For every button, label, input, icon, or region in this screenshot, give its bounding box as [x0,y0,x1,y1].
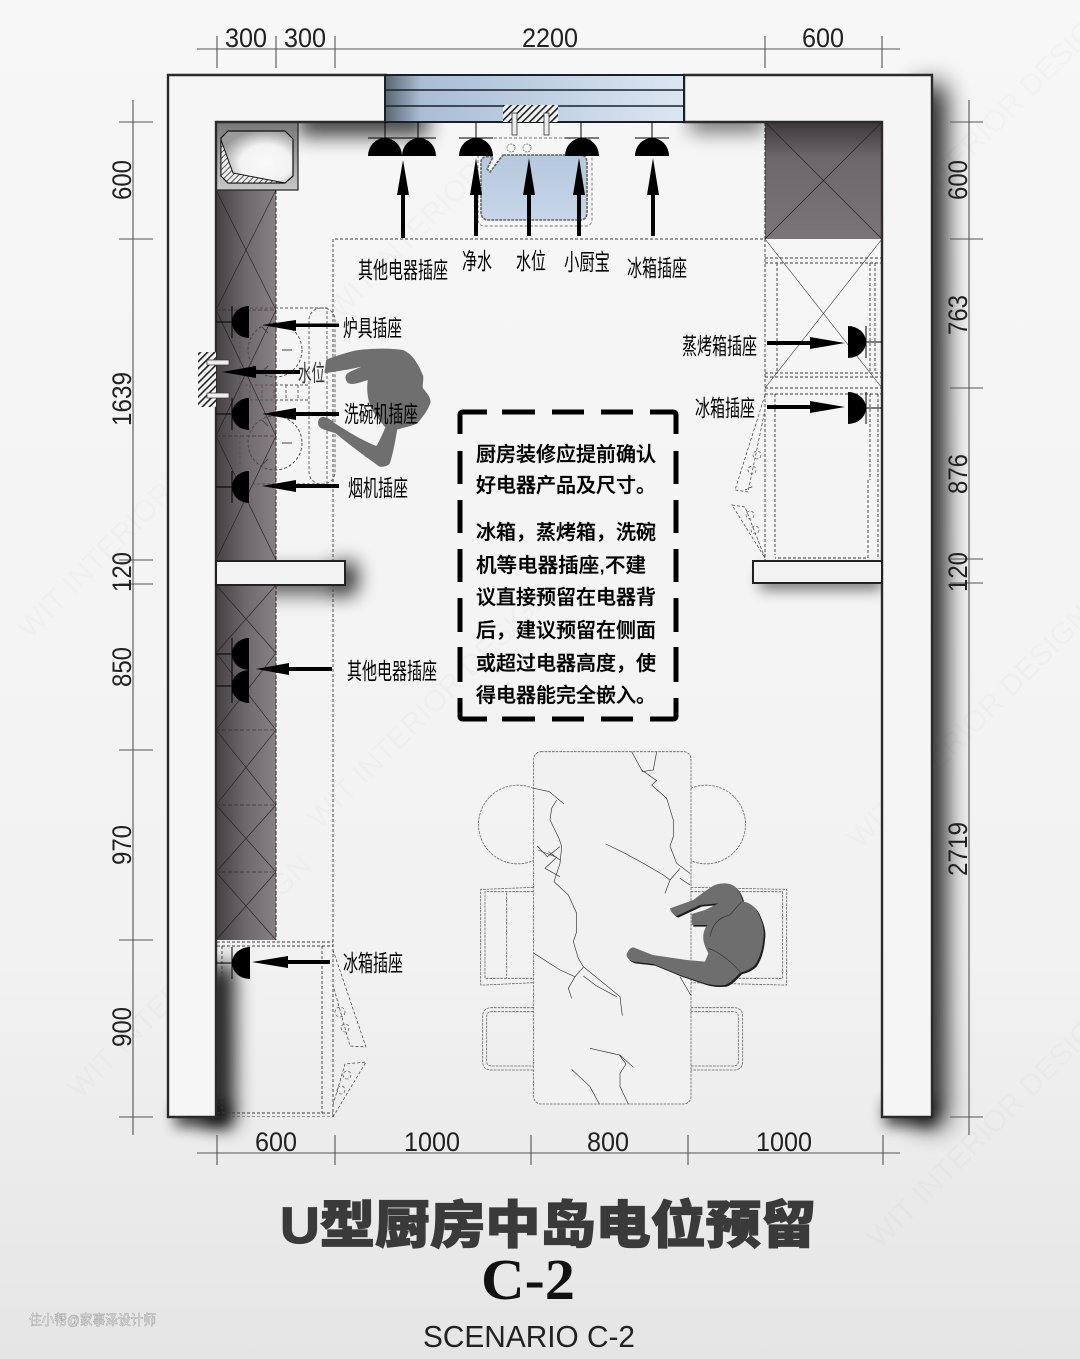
dimensions: top [197,23,900,68]
dimensions: bottom [197,1127,900,1165]
corner cabinet [216,122,298,190]
callout: note box: 好电器产品及尺寸。 [476,474,656,497]
dimensions: right: 876 [943,454,973,494]
dimensions: right: 763 [943,295,973,335]
right outlets and arrows [767,326,882,424]
dimensions: left: 600 [107,160,137,200]
dimensions: bottom: 1000 [756,1127,812,1157]
person at table [627,883,765,987]
dimensions: right: 600 [943,160,973,200]
label: fridge left: 冰箱插座 [343,950,403,976]
callout: note box [460,412,676,719]
dimensions: left [107,100,153,1135]
dimensions: right: 120 [943,552,973,592]
dimensions: left: 850 [107,647,137,687]
dimensions: top: 300 [284,23,326,53]
dimensions: left: 120 [107,552,137,592]
wall shadows [175,85,945,1127]
dimensions: bottom: 800 [587,1127,629,1157]
dining table and chairs [479,752,787,1104]
person at counter [319,349,430,466]
dimensions: left: 970 [107,825,137,865]
title: U型厨房中岛电位预留 [280,1197,816,1254]
fridge outlet left [216,947,330,979]
top outlet labels: 净水 [462,248,492,274]
source watermark: 住小帮@家事泽设计师 [29,1312,156,1328]
callout: note box: 议直接预留在电器背 [476,586,656,609]
dimensions: top: 300 [225,23,267,53]
dimensions: top: 2200 [522,23,578,53]
countertop and appliance outlines [217,239,882,1117]
dimensions: bottom: 1000 [404,1127,460,1157]
cabinets: dark tall units [216,122,882,940]
sink [478,113,592,226]
subtitle code: C-2 [481,1247,575,1312]
window [385,75,684,122]
dimensions: bottom: 600 [255,1127,297,1157]
dimensions: top: 600 [802,23,844,53]
right outlet labels [682,333,757,421]
tabletop [534,752,691,1104]
top outlet labels: 小厨宝 [564,249,610,275]
other appliances outlets [216,638,332,703]
top outlet labels: 水位 [516,248,546,274]
scenario caption: SCENARIO C-2 [423,1319,635,1354]
left water hatch [198,352,229,407]
callout: note box: 或超过电器高度，使 [476,652,656,675]
callout: note box: 后，建议预留在侧面 [476,619,656,642]
left outlet labels: 炉具插座 [343,315,402,341]
right outlet labels: 蒸烤箱插座 [682,333,757,359]
top arrows [397,158,659,238]
walls [168,75,932,1117]
top outlets [368,122,669,156]
left outlet labels: 水位 [298,360,325,386]
marble veins [534,752,691,1104]
label: other appliances: 其他电器插座 [347,658,437,684]
dimensions: right: 2719 [943,822,973,876]
top outlet labels: 其他电器插座 [358,257,448,283]
dimensions: right [943,100,983,1135]
left outlet labels: 洗碗机插座 [344,401,418,427]
left outlet labels: 烟机插座 [348,475,408,501]
top outlet labels [358,248,687,283]
callout: note box: 厨房装修应提前确认 [476,443,656,466]
callout: note box: 冰箱，蒸烤箱，洗碗 [476,521,656,544]
round stools [479,785,745,864]
top outlet labels: 冰箱插座 [627,255,687,281]
left outlets and arrows [216,306,339,503]
dimensions: left: 900 [107,1007,137,1047]
dimensions: left: 1639 [107,372,137,426]
callout: note box: 得电器能完全嵌入。 [476,684,656,707]
callout: note box: 机等电器插座,不建 [476,554,646,577]
left outlet labels [298,315,418,501]
right outlet labels: 冰箱插座 [695,395,755,421]
left and right chairs [481,887,533,985]
lower chairs [483,1008,533,1070]
